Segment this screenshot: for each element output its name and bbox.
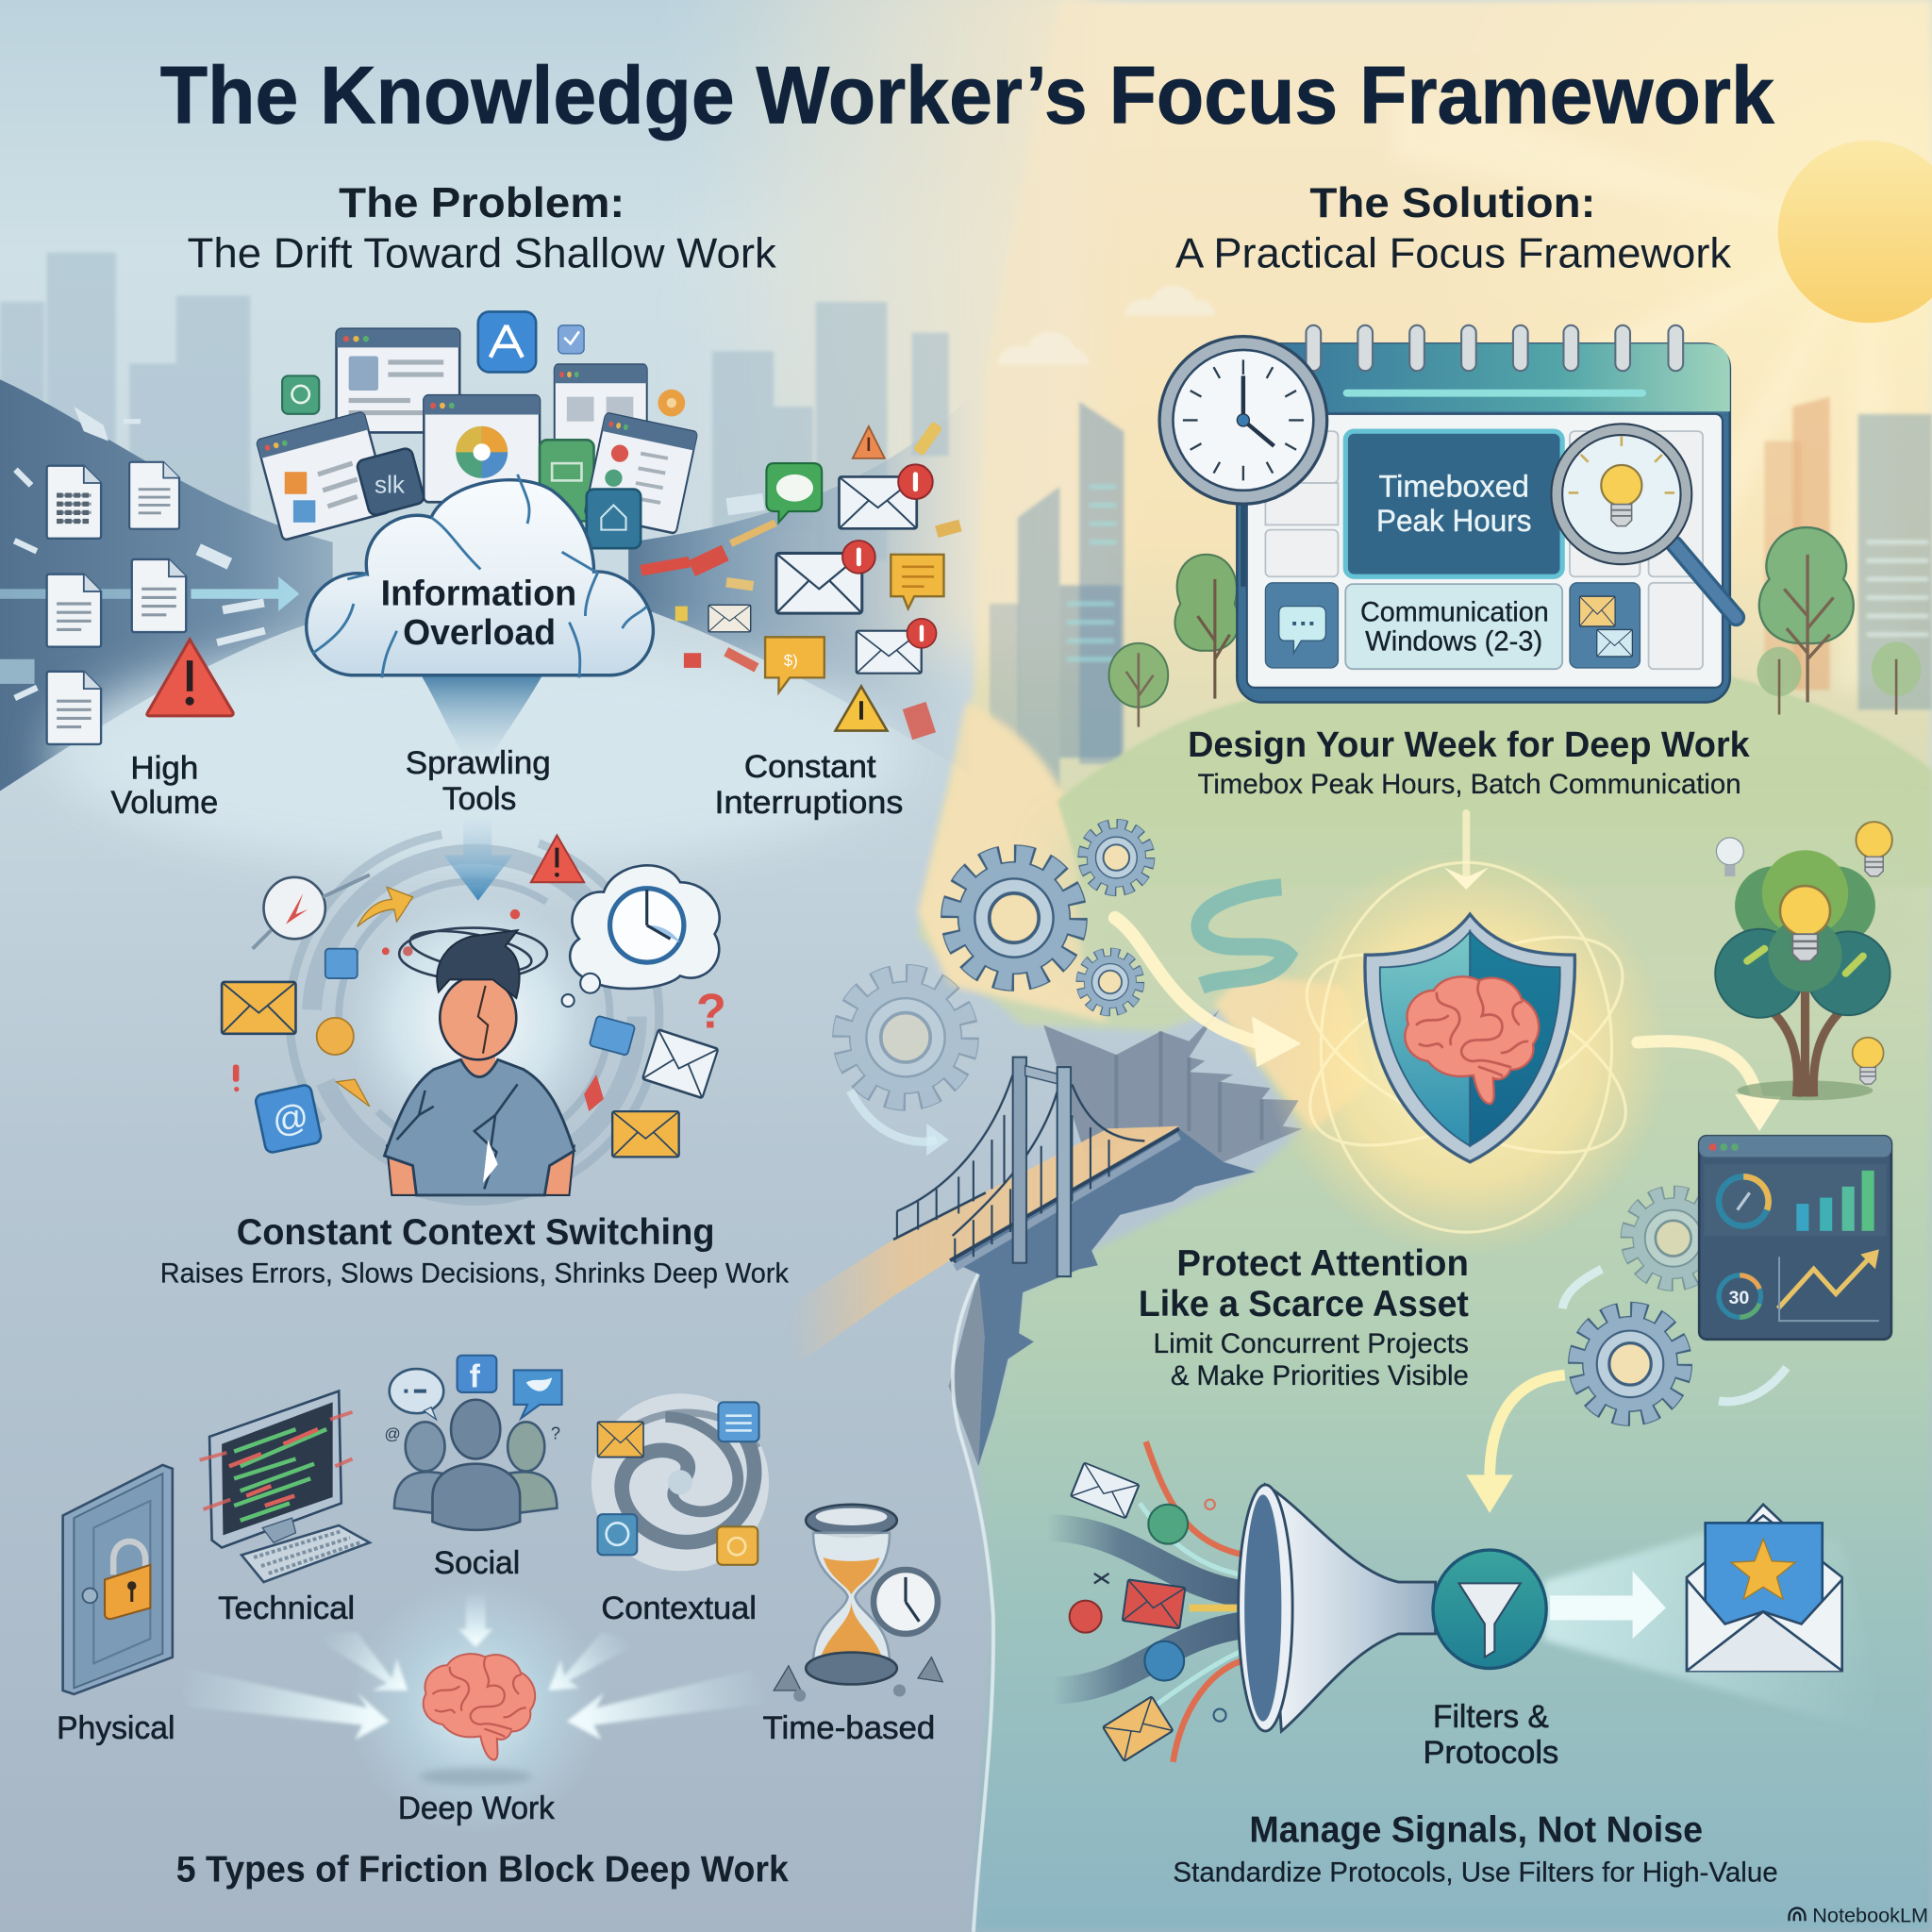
notebooklm watermark: NotebookLM [1812,1906,1928,1927]
heading: the problem [188,180,777,276]
icon: star envelope [1687,1505,1842,1671]
icon: app store tile [478,311,536,372]
mail tile [1570,583,1640,668]
icon: tool windows: slk [375,470,406,498]
swirl [290,832,659,1201]
icon: yellow messages [765,555,943,692]
calendar cells [1265,431,1703,669]
arrows to brain [175,1593,770,1740]
trees [1109,527,1921,727]
road [789,1126,1179,1370]
icon: social group: @ [385,1425,401,1443]
sun [1778,141,1932,323]
icon: scattered notifications: @ [269,1096,312,1142]
green hill [1058,675,1932,887]
heading: design your week: Design Your Week for Deep Work [1188,725,1751,765]
cliff face [949,1274,985,1466]
heading: manage signals: Manage Signals, Not Noise [1249,1810,1703,1851]
labels: friction types: Physical [57,1710,175,1746]
glow around shield [1263,850,1670,1257]
white river edge [953,1274,993,1932]
icon: clock in thought cloud [562,865,720,1007]
panel: information overload [0,311,974,868]
cream road behind hill [918,702,1109,1023]
labels: overload causes: Constant [744,749,876,785]
labels: friction types: Deep Work [398,1790,556,1826]
icon: noise envelopes and tokens [1070,1462,1226,1761]
heading: protect attention: Protect Attention [1176,1243,1469,1284]
text: standardize protocols: Standardize Protocols, Use Filters for High-Value [1173,1857,1778,1888]
heading: friction: 5 Types of Friction Block Deep Work [176,1849,789,1890]
chat tile [1265,583,1338,668]
icon: dizzy orbit [399,924,547,979]
icon: funnel [1239,1485,1436,1731]
icon: hourglass and clock [774,1505,942,1702]
text: context switching consequences: Raises Errors, Slows Decisions, Shrinks Deep Work [160,1258,790,1290]
panel: friction types [57,1356,942,1890]
stream fragments [0,407,777,701]
upper cliff walls [1043,1009,1303,1162]
background: solution side [918,0,1932,1932]
labels: overload causes [111,745,903,821]
person [385,930,575,1195]
labels: overload causes: Sprawling [406,745,551,781]
skyline: problem side [0,253,949,560]
icon: social group: f [470,1359,481,1395]
cloud funnel [419,672,544,754]
labels: overload causes: Tools [442,781,516,817]
chasm below deck [950,1128,1256,1466]
icon: green chat [766,463,822,523]
icon: documents [47,462,186,744]
timeboxed peak hours block [1345,431,1562,576]
bridge structure [893,1074,1179,1268]
arrow into head [443,818,512,901]
icon: scattered notifications: ? [696,984,726,1039]
icon: red warning [147,640,233,716]
labels: overload causes: Interruptions [715,785,903,821]
yellow arrow down [1466,1375,1565,1513]
label: filters and protocols: Filters & [1433,1699,1549,1735]
heading: the problem: The Drift Toward Shallow Work [188,230,777,276]
icon: scattered notifications [222,909,726,1157]
icon: dark app tile [356,447,425,516]
labels: overload causes: High [130,750,198,786]
labels: friction types [57,1545,935,1826]
heading: protect attention: Like a Scarce Asset [1139,1284,1469,1324]
panel: context switching [160,818,790,1290]
heading: protect attention [1139,1243,1469,1324]
communication windows block: Communication [1360,596,1549,627]
background: top soft transition [690,0,1096,653]
calendar [1159,325,1736,702]
icon: broken clock [253,874,370,949]
text: limit projects: & Make Priorities Visible [1171,1360,1469,1391]
label: filters and protocols [1424,1699,1558,1771]
icon: contextual swirl [591,1393,769,1571]
text: limit projects [1154,1328,1469,1391]
shield [1365,914,1574,1162]
skyline: solution side [990,397,1932,789]
cracked cloud [307,475,653,677]
icon: red warning [531,836,584,882]
icon: brain in shield [1405,976,1539,1104]
data stream: right band [628,394,974,776]
sun rays [1392,86,1909,690]
icon: wall clock [1159,337,1327,587]
icon: idea tree [1715,822,1892,1100]
icon: magnifying glass with bulb [1551,424,1736,617]
heading: the problem: The Problem: [339,180,625,226]
noise streams [1047,1441,1281,1762]
label: information overload: Information [381,574,576,613]
output beam [1544,1533,1891,1738]
icon: social group: ? [551,1424,560,1443]
clouds: solution side [998,286,1215,365]
arrow heads [1252,868,1782,1131]
labels: overload causes: Volume [111,785,218,821]
icon: warnings [836,421,962,740]
data stream: left band [0,379,333,791]
brain glow [347,1577,607,1836]
icon: blue flow arrow [191,576,299,611]
timeboxed peak hours block: Timeboxed [1379,468,1529,503]
labels: friction types: Time-based [762,1710,935,1746]
icon: yellow arrow [358,887,413,926]
dashboard gear [1577,1311,1683,1417]
energy orbits [1278,862,1654,1232]
icon: social group [385,1356,562,1530]
timeboxed peak hours block: Peak Hours [1376,503,1532,538]
label: information overload: Overload [403,613,556,653]
communication windows block [1345,584,1562,669]
faded dashboard gear [1628,1193,1718,1283]
warm ground above crack [1214,974,1368,1131]
icon: brain [424,1654,535,1760]
text: limit projects: Limit Concurrent Projects [1154,1328,1469,1359]
ground under streams [56,641,906,868]
panel: signals not noise [1047,1441,1891,1888]
heading: constant context switching: Constant Context Switching [237,1212,715,1253]
bridge towers [1013,1058,1071,1276]
icon: small tiles [558,325,584,354]
curved arrows in [1115,813,1759,1115]
labels: friction types: Contextual [601,1591,757,1626]
label: information overload [381,574,576,653]
heading: the solution: A Practical Focus Framework [1175,230,1732,276]
calendar rings [1306,325,1683,371]
background: sun glow [1401,0,1932,700]
panel: design your week [1109,325,1921,800]
icon: locked door [63,1465,173,1694]
text: timebox subtitle: Timebox Peak Hours, Batch Communication [1198,769,1741,800]
heading: the solution: The Solution: [1309,180,1595,226]
icon: filter badge [1433,1550,1546,1668]
gears [952,824,1149,1011]
icon: tool windows [257,311,697,548]
icon: yellow messages: $) [784,651,798,669]
icon: envelopes with alerts [708,464,937,674]
white loop arrows [1562,1269,1787,1402]
icon: monitor and keyboard [200,1391,370,1582]
labels: friction types: Social [434,1545,520,1581]
panel: protect attention [952,813,1892,1513]
heading: the solution [1175,180,1732,276]
faded gear [843,974,968,1100]
brain shadow [419,1768,532,1786]
label: filters and protocols: Protocols [1424,1735,1558,1771]
faded curved arrow [850,1091,937,1141]
title: The Knowledge Worker’s Focus Framework [160,51,1775,142]
panel: bridge across the chasm [789,974,1368,1932]
communication windows block: Windows (2-3) [1365,626,1542,658]
icon: analytics dashboard [1699,1136,1891,1340]
labels: friction types: Technical [218,1591,355,1626]
icon: analytics dashboard: 30 [1728,1288,1749,1308]
teal winding path [1200,887,1288,986]
